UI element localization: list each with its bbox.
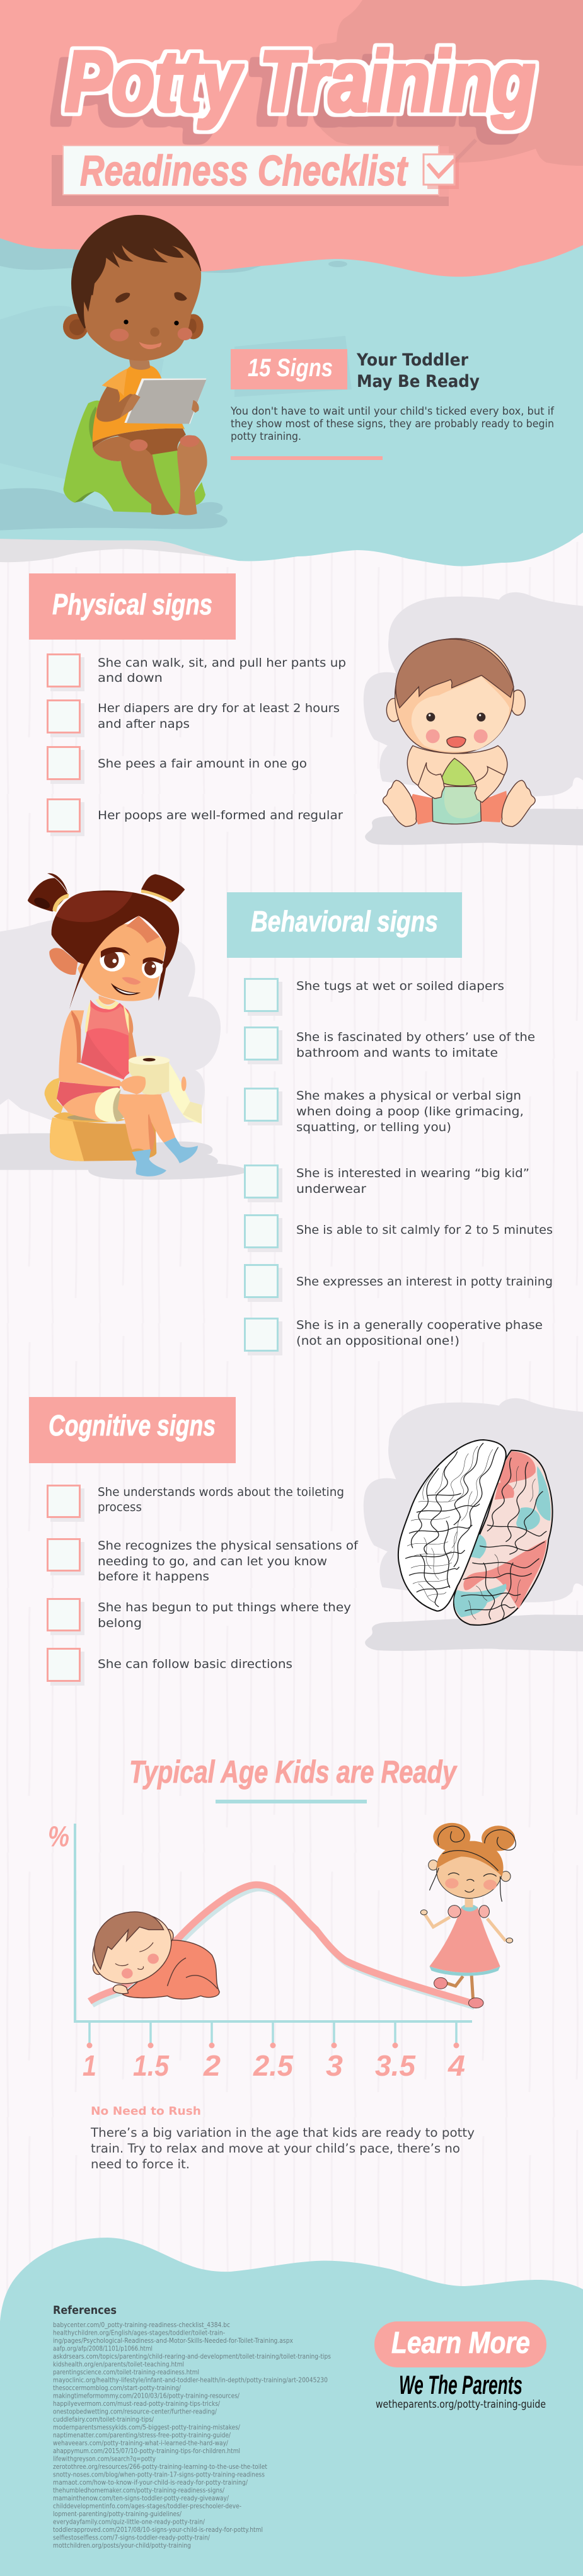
tick dots — [87, 2043, 459, 2048]
references list: ing/pages/Psychological-Readiness-and-Motor-Skills-Needed-for-Toilet-Training.aspx — [53, 2337, 293, 2345]
checklist item: pants: and down — [98, 671, 163, 685]
checklist item: diapers: She tugs at wet or soiled diapers — [296, 979, 504, 993]
references list: mottchildren.org/posts/your-child/potty-training — [53, 2541, 191, 2550]
x axis ticks — [89, 2021, 456, 2045]
references list: onestopbedwetting.com/resource-center/further-reading/ — [53, 2407, 217, 2416]
references list: thehumbledhomemaker.com/potty-training-readiness-signs/ — [53, 2487, 224, 2494]
y axis label: % — [48, 1820, 69, 1853]
darker teal shadow under pink wave, right of head — [199, 265, 265, 273]
checklist item: cooperative: (not an oppositional one!) — [296, 1334, 459, 1348]
heading: physical signs — [29, 573, 236, 640]
checklist item: interest — [245, 1265, 553, 1302]
checklist item: cooperative: She is in a generally cooperative phase — [296, 1318, 543, 1332]
illustration: standing girl in pink dress — [420, 1823, 516, 2008]
checklist item: cooperative — [245, 1318, 543, 1355]
chart: age curve — [48, 1820, 475, 2082]
checklist item: dry diapers: and after naps — [98, 717, 190, 731]
references list: lopment-parenting/potty-training-guidelines/ — [53, 2510, 182, 2518]
text block: no need to rush: need to force it. — [91, 2157, 190, 2171]
intro paragraph: they show most of these signs, they are probably ready to begin — [231, 418, 554, 430]
grey cloud behind brain — [364, 1398, 583, 1652]
intro paragraph — [230, 405, 555, 443]
checklist item: belong: She has begun to put things where they — [98, 1601, 351, 1614]
checklist item: belong: belong — [98, 1616, 142, 1630]
illustration: baby with stacking toy — [383, 638, 535, 827]
checklist item: sign: squatting, or telling you) — [296, 1120, 451, 1134]
x axis labels: 1.5 — [133, 2049, 170, 2082]
intro paragraph: potty training. — [231, 430, 301, 443]
checklist item: imitate: She is fascinated by others’ use of the — [296, 1030, 535, 1044]
illustration: sleeping baby — [78, 1904, 219, 1999]
axes — [75, 1824, 472, 2021]
references — [53, 2304, 331, 2550]
references list: snotty-noses.com/blog/when-potty-train-17-signs-potty-training-readiness — [53, 2470, 265, 2479]
checklist item: sign: when doing a poop (like grimacing, — [296, 1105, 524, 1118]
references list — [53, 2321, 331, 2550]
heading: cognitive signs: Cognitive signs — [49, 1409, 216, 1442]
checklist item: poops: Her poops are well-formed and regular — [98, 808, 343, 822]
subtitle banner — [52, 146, 449, 206]
references list: babycenter.com/0_potty-training-readiness-checklist_4384.bc — [53, 2321, 230, 2329]
heading: your toddler may be ready — [356, 350, 480, 391]
illustration: girl on potty with toilet roll — [0, 873, 248, 1180]
header band: pink wave — [0, 0, 583, 277]
illustration: brain — [398, 1440, 553, 1625]
heading: behavioral signs: Behavioral signs — [251, 905, 438, 938]
references list: aafp.org/afp/2008/1101/p1066.html — [53, 2344, 153, 2353]
heading: behavioral signs — [227, 892, 462, 958]
heading: cognitive signs — [29, 1397, 236, 1463]
x axis labels: 1 — [83, 2049, 96, 2082]
intro paragraph: You don't have to wait until your child's ticked every box, but if — [230, 405, 555, 418]
checklist item: sit calmly: She is able to sit calmly for 2 to 5 minutes — [296, 1223, 553, 1237]
references list: mayoclinic.org/healthy-lifestyle/infant-and-toddler-health/in-depth/potty-training/art-20045230 — [53, 2376, 328, 2384]
x axis labels: 4 — [447, 2049, 465, 2082]
illustration: boy on potty with tablet — [0, 215, 228, 531]
darker teal shadow under pink wave, left — [0, 233, 82, 270]
text block: no need to rush — [90, 2105, 475, 2171]
checklist item: underwear: underwear — [296, 1182, 366, 1196]
references list: parentingscience.com/toilet-training-readiness.html — [53, 2368, 199, 2376]
references list: makingtimeformommy.com/2010/03/16/potty-training-resources/ — [53, 2392, 240, 2400]
checklist item: sensations — [48, 1539, 359, 1584]
chart heading underline — [216, 1800, 367, 1803]
panel: behavioral signs — [227, 892, 553, 1355]
checklist item: sensations: needing to go, and can let you know — [98, 1555, 327, 1568]
checklist item: pees — [48, 747, 307, 784]
references list: zerotothree.org/resources/266-potty-training-learning-to-the-use-the-toilet — [53, 2463, 268, 2471]
faint tilted card behind sign badge — [234, 336, 352, 397]
references list: selfiestoselfless.com/7-signs-toddler-ready-potty-train/ — [53, 2533, 210, 2542]
checklist item: underwear — [245, 1166, 529, 1202]
text block: no need to rush: No Need to Rush — [91, 2105, 201, 2118]
small teal spot — [328, 261, 347, 267]
button: learn more: Learn More — [391, 2326, 530, 2360]
heading: your toddler may be ready: May Be Ready — [357, 372, 480, 391]
badge: 15 Signs: 15 Signs — [248, 354, 333, 382]
text block: no need to rush: There’s a big variation in the age that kids are ready to potty — [90, 2125, 475, 2140]
faint cloud behind boy — [0, 306, 164, 484]
readiness curve — [89, 1885, 472, 2003]
checklist item: words: process — [98, 1500, 142, 1514]
checklist item: imitate — [245, 1027, 535, 1064]
checklist item: sign: She makes a physical or verbal sign — [296, 1089, 521, 1103]
footer teal wave — [0, 2238, 583, 2576]
references list: childdevelopmentinfo.com/ages-stages/toddler-preschooler-deve- — [53, 2502, 241, 2510]
references list: ahappymum.com/2015/07/10-potty-training-tips-for-children.html — [53, 2447, 240, 2455]
checklist item: dry diapers: Her diapers are dry for at least 2 hours — [98, 701, 340, 715]
button: learn more — [374, 2321, 546, 2367]
references list: cuddlefairy.com/toilet-training-tips/ — [53, 2415, 154, 2424]
heading: physical signs: Physical signs — [52, 588, 212, 621]
subtitle text: Readiness Checklist — [80, 147, 408, 195]
checklist item: words: She understands words about the toileting — [98, 1485, 344, 1499]
checklist item: sensations: She recognizes the physical sensations of — [98, 1539, 359, 1553]
text block: no need to rush: train. Try to relax and move at your child’s pace, there’s no — [91, 2141, 460, 2156]
checklist item: directions — [48, 1648, 292, 1686]
references list: healthychildren.org/English/ages-stages/toddler/toilet-train- — [53, 2329, 225, 2337]
icon: ticked checkbox — [424, 140, 476, 189]
x axis labels — [83, 2049, 465, 2082]
panel: cognitive signs — [29, 1397, 359, 1686]
references heading: References — [53, 2304, 117, 2317]
checklist item: underwear: She is interested in wearing “big kid” — [296, 1166, 529, 1180]
x axis labels: 3 — [326, 2049, 343, 2082]
checklist item: sit calmly — [245, 1215, 553, 1252]
website url: wetheparents.org/potty-training-guide — [376, 2398, 546, 2411]
checklist item: imitate: bathroom and wants to imitate — [296, 1046, 498, 1060]
divider bar — [231, 456, 383, 460]
checklist item: words — [48, 1485, 344, 1522]
references list: mamainthenow.com/ten-signs-toddler-potty-ready-giveaway/ — [53, 2494, 229, 2502]
checklist item: poops — [48, 799, 343, 836]
header band: grey wave — [0, 536, 253, 562]
badge: 15 Signs — [231, 349, 347, 389]
checklist item: sensations: before it happens — [98, 1570, 209, 1584]
curve shadow — [92, 1888, 475, 2006]
x axis labels: 3.5 — [375, 2049, 416, 2082]
panel: physical signs — [29, 573, 346, 836]
references list: happilyevermom.com/must-read-potty-training-tips-tricks/ — [53, 2400, 220, 2408]
checklist item: directions: She can follow basic directions — [98, 1657, 292, 1671]
checklist item: interest: She expresses an interest in potty training — [296, 1275, 553, 1289]
references list: naptimenatter.com/parenting/stress-free-potty-training-guide/ — [53, 2431, 231, 2439]
references list: lifewithgreyson.com/search?q=potty — [53, 2455, 156, 2463]
references list: mamaot.com/how-to-know-if-your-child-is-ready-for-potty-training/ — [53, 2478, 248, 2487]
references list: everydayfamily.com/quiz-little-one-ready-potty-train/ — [53, 2518, 205, 2526]
references list: wehaveears.com/potty-training-what-i-learned-the-hard-way/ — [53, 2439, 228, 2447]
checklist item: pees: She pees a fair amount in one go — [98, 757, 307, 771]
chart heading: Typical Age Kids are Ready — [129, 1754, 458, 1790]
checklist item: diapers — [245, 979, 504, 1016]
darker pink cloud, top right — [309, 0, 583, 166]
references list: askdrsears.com/topics/parenting/child-rearing-and-development/toilet-training/toilet-traning-tips — [53, 2352, 331, 2360]
checklist item: pants — [48, 654, 346, 691]
checklist item: sign — [245, 1089, 524, 1134]
x axis labels: 2 — [203, 2049, 221, 2082]
heading: your toddler may be ready: Your Toddler — [356, 350, 469, 370]
references list: toddlerapproved.com/2017/08/10-signs-your-child-is-ready-for-potty.html — [53, 2526, 263, 2534]
references list: thesoccermomblog.com/start-potty-training/ — [53, 2384, 181, 2392]
checklist item: dry diapers — [48, 701, 340, 737]
x axis labels: 2.5 — [253, 2049, 294, 2082]
references list: kidshealth.org/en/parents/toilet-teaching.html — [53, 2360, 184, 2368]
references list: modernparentsmessykids.com/5-biggest-potty-training-mistakes/ — [53, 2424, 240, 2431]
checklist item: belong — [48, 1599, 351, 1635]
header band: teal wave — [0, 233, 583, 566]
grey cloud behind baby — [364, 592, 583, 846]
checklist item: pants: She can walk, sit, and pull her pants up — [98, 656, 346, 670]
